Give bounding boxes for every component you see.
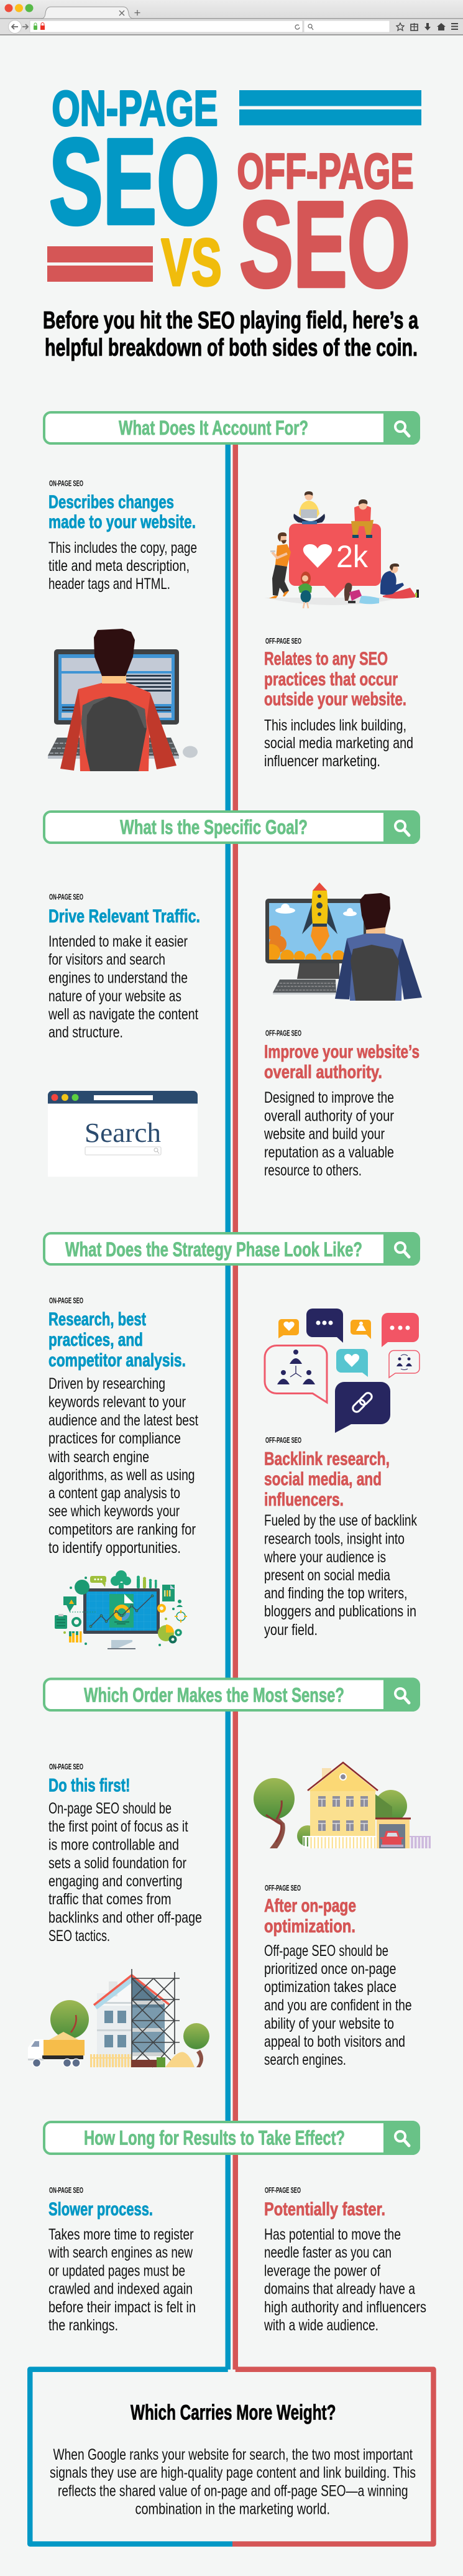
body text: website and build your [264,1126,385,1143]
tab close and new tab [119,10,140,16]
body text: where your audience is [264,1549,386,1566]
label: ON-PAGE SEO [49,479,83,488]
sand pile [165,2052,195,2067]
center lines [225,443,238,2370]
body text: This includes the copy, page [48,539,197,557]
body text: prioritized once on-page [264,1960,397,1978]
conclusion text: combination in the marketing world. [135,2501,330,2518]
illustration: search page [48,1091,198,1177]
heading [48,1309,186,1371]
toolbar icons [397,23,458,30]
search bar heading 3: What Does the Strategy Phase Look Like? [65,1238,362,1261]
house body [308,1763,378,1848]
heading: Drive Relevant Traffic. [48,906,200,927]
icon: magnifier [395,821,409,835]
body text [48,1800,202,1945]
heading [264,649,406,710]
dark half of house [132,1975,165,2056]
panel: off-page goal [263,883,422,1179]
label: OFF-PAGE SEO [265,1029,301,1037]
small orange bubble [351,1320,371,1339]
body text: leverage the power of [264,2263,380,2280]
person with hoodie on floor [380,563,419,598]
body text: Takes more time to register [48,2226,194,2243]
icon: magnifier [395,1689,409,1703]
browser tab [41,7,134,19]
heading: optimization. [264,1916,355,1937]
heading: Backlink research, [264,1449,390,1470]
body text: Driven by researching [48,1375,165,1392]
panel: conclusion [30,2370,434,2544]
icon: heart [303,544,332,568]
tree and people [111,1570,157,1588]
heading [264,1449,390,1510]
body text: practices for compliance [48,1430,181,1447]
body text: present on social media [264,1567,390,1584]
white half of house [94,1975,132,2067]
body text: needle faster as you can [264,2244,392,2261]
small outline bubble [389,1351,419,1378]
tree [254,1778,295,1848]
heading: Do this first! [48,1776,131,1796]
heading [264,1042,419,1083]
heading: Potentially faster. [264,2199,385,2220]
heading: overall authority. [264,1062,382,1083]
heading: Relates to any SEO [264,649,388,669]
navy bubble [306,1309,343,1343]
chat bubble [90,1576,106,1587]
panel: on-page goal [48,892,200,1177]
reload and magnifier [295,24,313,30]
body text: sets a solid foundation for [48,1855,186,1872]
roof line [94,1975,169,2005]
panel: on-page order [28,1762,209,2067]
label: ON-PAGE SEO [49,892,83,902]
navy link bubble [335,1382,390,1433]
heading: social media, and [264,1469,382,1490]
title: vs: VS [162,225,221,300]
right icons [158,1585,187,1642]
panel: on-page account for [48,479,198,771]
body text: the rankings. [48,2317,118,2334]
body text: and structure. [48,1024,123,1041]
frame: blue and red [30,2370,434,2544]
search bar heading 5: How Long for Results to Take Effect? [84,2127,345,2149]
title: on-page seo [49,81,421,250]
heading [264,1896,356,1937]
person with laptop [293,491,325,524]
body text [264,716,413,770]
search bar heading 2: What Is the Specific Goal? [120,816,308,838]
body text: backlinks and other off-page [48,1909,202,1927]
body text: nature of your website as [48,988,181,1005]
body text: crawled and indexed again [48,2280,193,2297]
illustration: social chat bubbles [265,1309,419,1433]
body text [264,1942,412,2069]
small yellow bubble [278,1319,299,1338]
body text: influencer marketing. [264,753,380,770]
heading: After on-page [264,1896,356,1916]
left icons [55,1580,96,1642]
body text: Intended to make it easier [48,933,188,950]
heading [48,492,196,532]
body text: optimization takes place [264,1978,397,1996]
body text: reputation as a valuable [264,1144,394,1161]
panel: off-page timing [264,2185,426,2334]
body text: see which keywords your [48,1503,180,1520]
body text: to identify opportunities. [48,1539,181,1557]
body text: bloggers and publications in [264,1603,416,1620]
body text: traffic that comes from [48,1891,172,1908]
heading: competitor analysis. [48,1350,186,1371]
document with donut [109,1594,134,1628]
search bar heading 4 [44,1678,420,1712]
body text [48,2226,196,2334]
truck [28,2032,85,2067]
body text: or updated pages must be [48,2263,185,2280]
illustration: people around like bubble [264,491,419,608]
body text: with search engines as new [48,2244,193,2261]
security icons [34,22,45,30]
monitor [83,1588,160,1649]
subtitle [43,307,418,361]
conclusion heading: Which Carries More Weight? [131,2401,336,2425]
illustration: search page: Search [85,1118,161,1148]
body text: This includes link building, [264,716,406,734]
heading: Research, best [48,1309,146,1330]
body text: high authority and influencers [264,2299,426,2316]
garage and car [375,1817,411,1848]
body text: title and meta description, [48,557,190,575]
icon: magnifier [395,422,409,436]
icon: magnifier [395,1243,409,1257]
body text: Has potential to move the [264,2226,401,2243]
label: OFF-PAGE SEO [265,2185,301,2195]
panel: off-page order [254,1763,431,2069]
body text: engaging and converting [48,1873,183,1890]
tree left [50,2000,89,2039]
title: on-page seo: ON-PAGE [52,81,218,136]
body text: Off-page SEO should be [264,1942,388,1960]
body text: social media marketing and [264,734,413,752]
icon: magnifier [395,2131,409,2146]
label: ON-PAGE SEO [49,1296,83,1305]
line chart [89,1595,154,1628]
body text: SEO tactics. [48,1927,110,1945]
heading: practices, and [48,1330,143,1350]
heading: influencers. [264,1490,344,1510]
body text: competitors are ranking for [48,1521,196,1539]
body text: header tags and HTML. [48,575,170,593]
panel: on-page timing [48,2185,196,2334]
body text: appeal to both visitors and [264,2033,405,2050]
fences [303,1836,431,1848]
search bar heading 1 [44,411,420,445]
browser window chrome [0,0,463,35]
window buttons [5,4,34,12]
illustration: house under construction [28,1969,209,2067]
conclusion text [50,2446,416,2518]
panel: on-page strategy [48,1296,198,1649]
body text: search engines. [264,2051,346,2069]
heading: Slower process. [48,2199,153,2220]
person crouching with phone [298,572,312,608]
label: OFF-PAGE SEO [265,1435,301,1445]
person sitting on bubble [351,499,374,538]
body text: for visitors and search [48,951,165,968]
red bubble [382,1313,419,1347]
label: OFF-PAGE SEO [265,1883,301,1893]
label: ON-PAGE SEO [49,2185,83,2195]
body text [48,933,198,1041]
heading: Describes changes [48,492,174,512]
title: off-page seo [47,143,414,312]
like count: 2k [336,539,369,574]
body text: and you are confident in the [264,1997,412,2014]
body text: research tools, insight into [264,1530,405,1547]
search bar heading 5 [44,2121,420,2155]
body text: is more controllable and [48,1836,179,1853]
body text: with search engine [48,1448,149,1466]
label: OFF-PAGE SEO [265,636,301,646]
body text: keywords relevant to your [48,1394,186,1411]
title: on-page seo: SEO [49,113,219,250]
body text: with a wide audience. [264,2317,378,2334]
heading: outside your website. [264,689,406,710]
scaffold [132,1969,180,2067]
body text [48,1375,198,1557]
body text: algorithms, as well as using [48,1466,195,1484]
body text: well as navigate the content [48,1006,198,1023]
body text: Designed to improve the [264,1089,394,1106]
search bar heading 2 [44,810,420,844]
body text [264,2226,426,2334]
tree right [183,2023,209,2067]
body text: before their impact is felt in [48,2299,196,2316]
body text: ability of your website to [264,2015,394,2032]
search field [304,21,390,32]
body text: On-page SEO should be [48,1800,172,1817]
search bar heading 4: Which Order Makes the Most Sense? [84,1684,344,1707]
body text: engines to understand the [48,969,188,986]
body text: Fueled by the use of backlink [264,1512,417,1529]
illustration: analytics dashboard [55,1570,187,1649]
body text [264,1089,394,1179]
title [47,81,421,312]
body text: overall authority of your [264,1107,394,1124]
heading: made to your website. [48,512,196,532]
panel: off-page account for [264,491,419,770]
body text [264,1512,417,1639]
body text: the first point of focus as it [48,1818,188,1835]
body text: and finding the top writers, [264,1585,408,1602]
search bar heading 3 [44,1232,420,1266]
network outline bubble [265,1346,327,1402]
illustration: rocket on monitor with person [263,883,422,1001]
person lying down [344,583,379,604]
nav buttons [9,20,28,34]
body text: resource to others. [264,1162,362,1179]
body text: audience and the latest best [48,1412,198,1429]
panel: off-page strategy [264,1309,419,1639]
label: ON-PAGE SEO [49,1762,83,1771]
illustration: finished house [254,1763,431,1848]
bushes [297,1790,407,1846]
teal bubble [336,1349,368,1377]
heading: practices that occur [264,669,398,690]
illustration: person at computer [48,629,198,771]
body text: your field. [264,1621,318,1639]
body text [48,539,197,593]
body text: domains that already have a [264,2280,415,2297]
search bar heading 1: What Does It Account For? [119,417,308,439]
body text: a content gap analysis to [48,1485,180,1502]
small dots [63,1577,175,1646]
fence and base [90,2054,165,2067]
url bar [30,21,303,32]
person standing with phone [269,532,291,598]
